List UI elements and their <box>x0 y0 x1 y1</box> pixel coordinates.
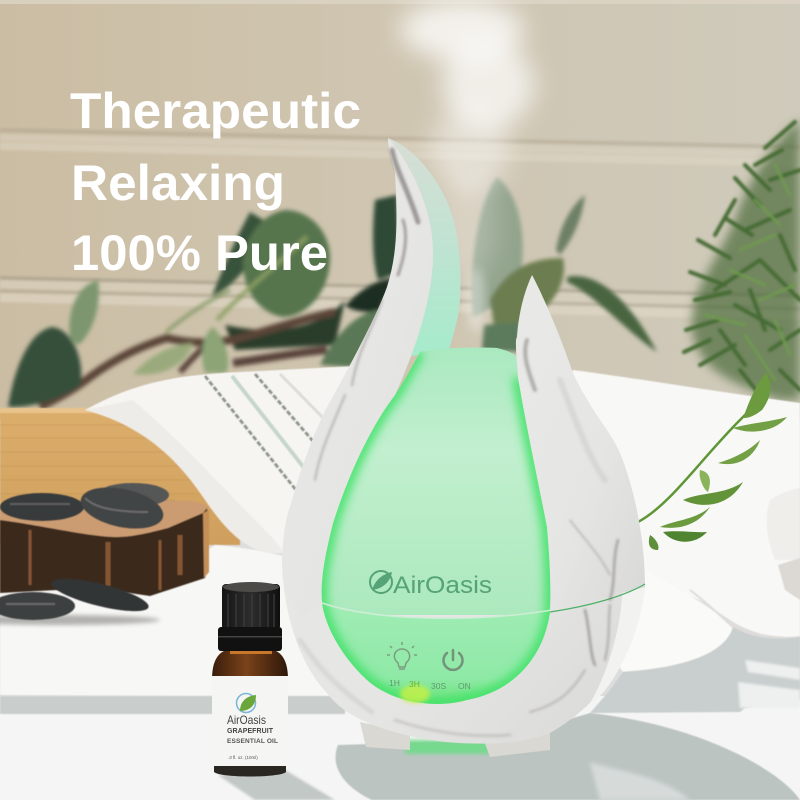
bottle label: ESSENTIAL OIL <box>227 738 278 745</box>
diffuser feet <box>360 722 550 757</box>
table surface <box>0 627 800 800</box>
bottle cap <box>218 582 282 651</box>
icon: light bulb <box>387 642 417 669</box>
towel: right <box>560 370 800 672</box>
plant: eucalyptus branches behind towel <box>8 177 657 407</box>
background wall <box>0 0 800 420</box>
control labels: 30S <box>431 681 446 691</box>
amber glass <box>212 650 288 680</box>
bright LED glow <box>400 685 430 703</box>
essential oil bottle <box>212 582 288 776</box>
marble veins <box>300 150 618 736</box>
steam wisp <box>467 268 485 332</box>
bottle base <box>214 762 286 776</box>
towel: bottom <box>0 545 340 697</box>
hot stones <box>0 481 169 625</box>
flame translucent petal <box>388 138 460 356</box>
plant: fern top right <box>684 120 800 400</box>
seam line <box>550 584 645 612</box>
right marble petal <box>516 275 645 612</box>
bottle shadow <box>218 770 335 800</box>
headline: Therapeutic <box>70 83 361 139</box>
icon: power <box>444 650 463 670</box>
steam <box>400 0 534 280</box>
left marble petal <box>282 138 433 620</box>
control labels: 1H <box>389 678 400 688</box>
towel: folded left <box>85 366 355 553</box>
green glowing reservoir <box>322 348 550 704</box>
headline: 100% Pure <box>71 225 328 281</box>
wooden box <box>0 408 240 545</box>
control labels <box>389 678 471 691</box>
diffuser base <box>282 377 645 744</box>
headline <box>70 83 361 281</box>
headline: Relaxing <box>71 155 285 211</box>
base white right edge <box>590 584 645 703</box>
bottle label: GRAPEFRUIT <box>227 728 274 735</box>
control labels: 3H <box>409 679 420 689</box>
bottle label: AirOasis <box>227 713 266 727</box>
bottle label <box>212 676 288 766</box>
control labels: ON <box>458 681 471 691</box>
wood slab <box>0 500 209 596</box>
diffuser <box>282 138 645 757</box>
brand logo on diffuser: AirOasis <box>393 572 492 599</box>
bottle label: .3 fl. oz. (10ml) <box>228 755 258 760</box>
branch with small leaves <box>638 373 787 550</box>
shadow disc under diffuser <box>336 713 800 800</box>
